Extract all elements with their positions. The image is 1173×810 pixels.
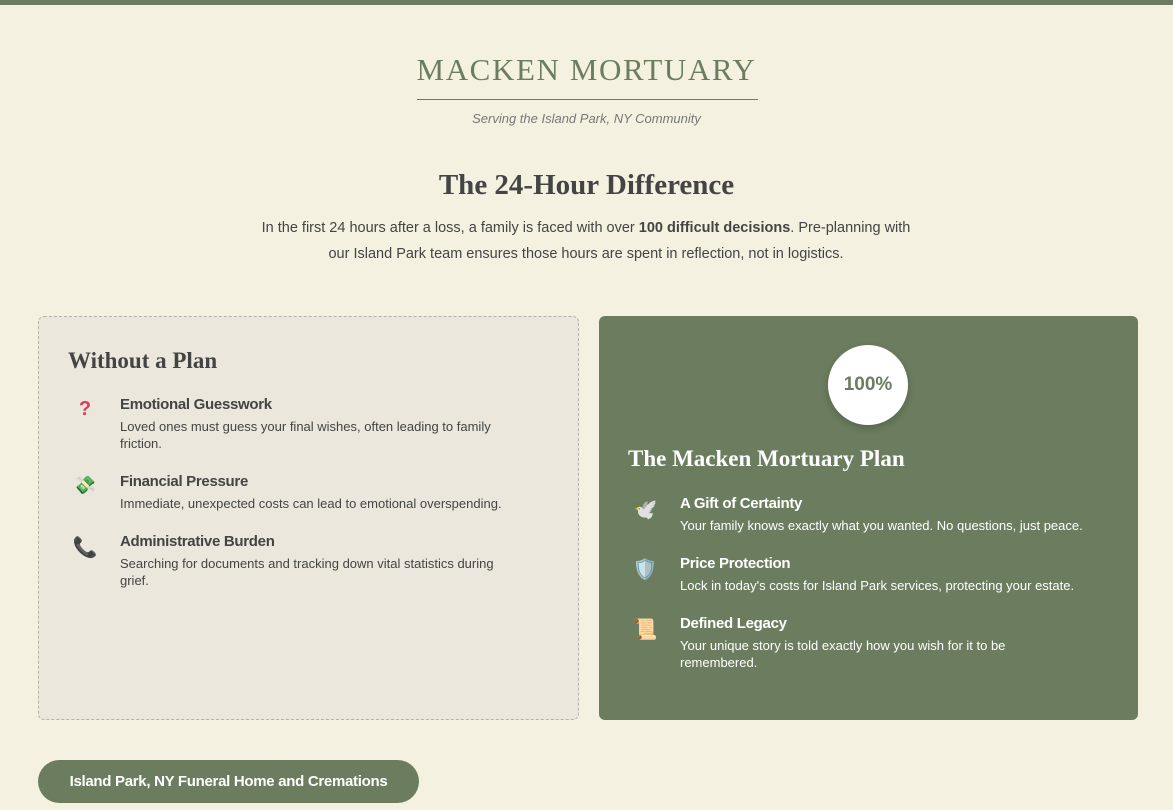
- heading: The 24-Hour Difference: [439, 169, 734, 201]
- panel: without a plan: ?: [79, 398, 91, 420]
- panel: without a plan: [38, 316, 579, 720]
- title: MACKEN MORTUARY: [417, 52, 756, 87]
- panel: macken plan: 🕊️: [633, 499, 657, 521]
- panel: without a plan: Loved ones must guess your final wishes, often leading to family friction.: [120, 419, 491, 451]
- button: [38, 760, 419, 803]
- panel: without a plan: Searching for documents and tracking down vital statistics during grief.: [120, 556, 494, 588]
- intro text: In the first 24 hours after a loss, a family is faced with over 100 difficult decisions. Pre-planning with: [262, 220, 910, 236]
- panel: macken plan: Price Protection: [680, 555, 790, 572]
- panel: macken plan: [599, 316, 1138, 720]
- panel: macken plan: Defined Legacy: [680, 615, 787, 632]
- panel: macken plan: Your family knows exactly what you wanted. No questions, just peace.: [680, 518, 1083, 533]
- item: emotional guesswork: [79, 396, 491, 451]
- panel: macken plan: Lock in today's costs for Island Park services, protecting your estate.: [680, 578, 1074, 593]
- badge 100%: 100%: [844, 374, 892, 395]
- panel: without a plan: 📞: [73, 537, 97, 559]
- item: defined legacy: [633, 615, 1005, 670]
- panel: without a plan: Immediate, unexpected costs can lead to emotional overspending.: [120, 496, 502, 511]
- panel heading: The Macken Mortuary Plan: [628, 446, 905, 471]
- item: administrative burden: [73, 533, 494, 588]
- intro text: our Island Park team ensures those hours are spent in reflection, not in logistics.: [328, 246, 844, 262]
- item: price protection: [633, 555, 1074, 593]
- panel: without a plan: 💸: [74, 475, 96, 495]
- intro text: [262, 220, 910, 262]
- panel: macken plan: 🛡️: [633, 559, 657, 581]
- panel: without a plan: Emotional Guesswork: [120, 396, 272, 413]
- panel: without a plan: Financial Pressure: [120, 473, 248, 490]
- button: Island Park, NY Funeral Home and Cremations: [70, 773, 387, 790]
- item: gift of certainty: [633, 495, 1083, 533]
- item: financial pressure: [74, 473, 502, 511]
- subtitle: Serving the Island Park, NY Community: [472, 111, 701, 126]
- badge 100%: [828, 345, 908, 425]
- panel: macken plan: 📜: [633, 619, 657, 641]
- panel: macken plan: Your unique story is told exactly how you wish for it to be remembered.: [680, 638, 1005, 670]
- panel: without a plan: Administrative Burden: [120, 533, 275, 550]
- panel heading: Without a Plan: [68, 348, 217, 373]
- panel: macken plan: A Gift of Certainty: [680, 495, 802, 512]
